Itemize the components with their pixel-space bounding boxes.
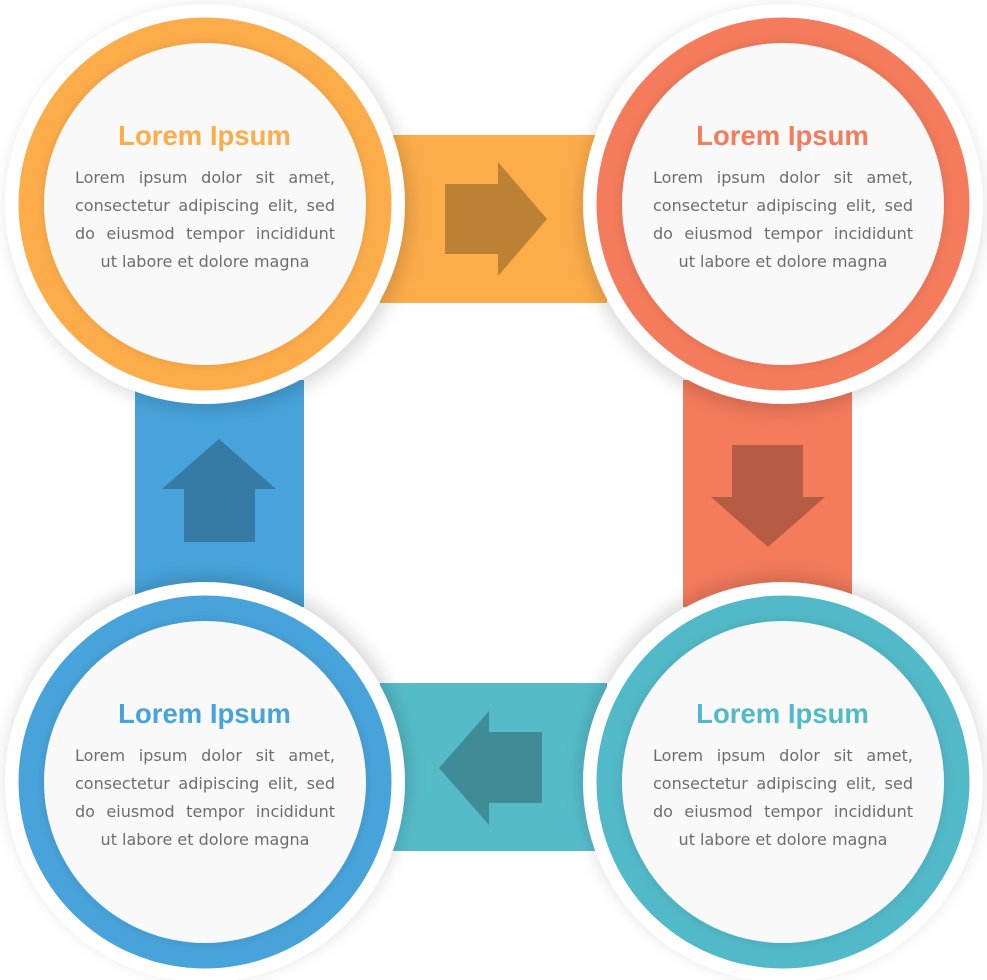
text block: do eiusmod tempor incididunt: [75, 224, 335, 242]
text block: do eiusmod tempor incididunt: [653, 802, 913, 820]
text block: ut labore et dolore magna: [101, 830, 309, 848]
text block: [75, 168, 335, 270]
text block: Lorem ipsum dolor sit amet,: [75, 746, 335, 764]
connector: red bar with down arrow: [683, 380, 852, 607]
text block: Lorem ipsum dolor sit amet,: [75, 168, 335, 186]
text block: Lorem ipsum dolor sit amet,: [653, 746, 913, 764]
text block: ut labore et dolore magna: [101, 252, 309, 270]
connector: blue bar with up arrow: [135, 380, 304, 607]
heading: Lorem Ipsum: [696, 120, 869, 151]
text block: [75, 746, 335, 848]
text block: ut labore et dolore magna: [679, 830, 887, 848]
text block: consectetur adipiscing elit, sed: [653, 774, 913, 792]
heading: Lorem Ipsum: [118, 120, 291, 151]
text block: consectetur adipiscing elit, sed: [75, 196, 335, 214]
connector: orange bar with right arrow: [380, 135, 607, 303]
text block: [653, 746, 913, 848]
panel: red circle: [574, 3, 987, 417]
text block: do eiusmod tempor incididunt: [75, 802, 335, 820]
text block: ut labore et dolore magna: [679, 252, 887, 270]
panel: blue circle: [1, 570, 414, 980]
panel: teal circle: [576, 569, 987, 980]
text block: do eiusmod tempor incididunt: [653, 224, 913, 242]
text block: consectetur adipiscing elit, sed: [75, 774, 335, 792]
text block: Lorem ipsum dolor sit amet,: [653, 168, 913, 186]
panel: orange circle: [3, 2, 417, 416]
heading: Lorem Ipsum: [696, 698, 869, 729]
text block: [653, 168, 913, 270]
connector: teal bar with left arrow: [380, 683, 607, 851]
text block: consectetur adipiscing elit, sed: [653, 196, 913, 214]
heading: Lorem Ipsum: [118, 698, 291, 729]
